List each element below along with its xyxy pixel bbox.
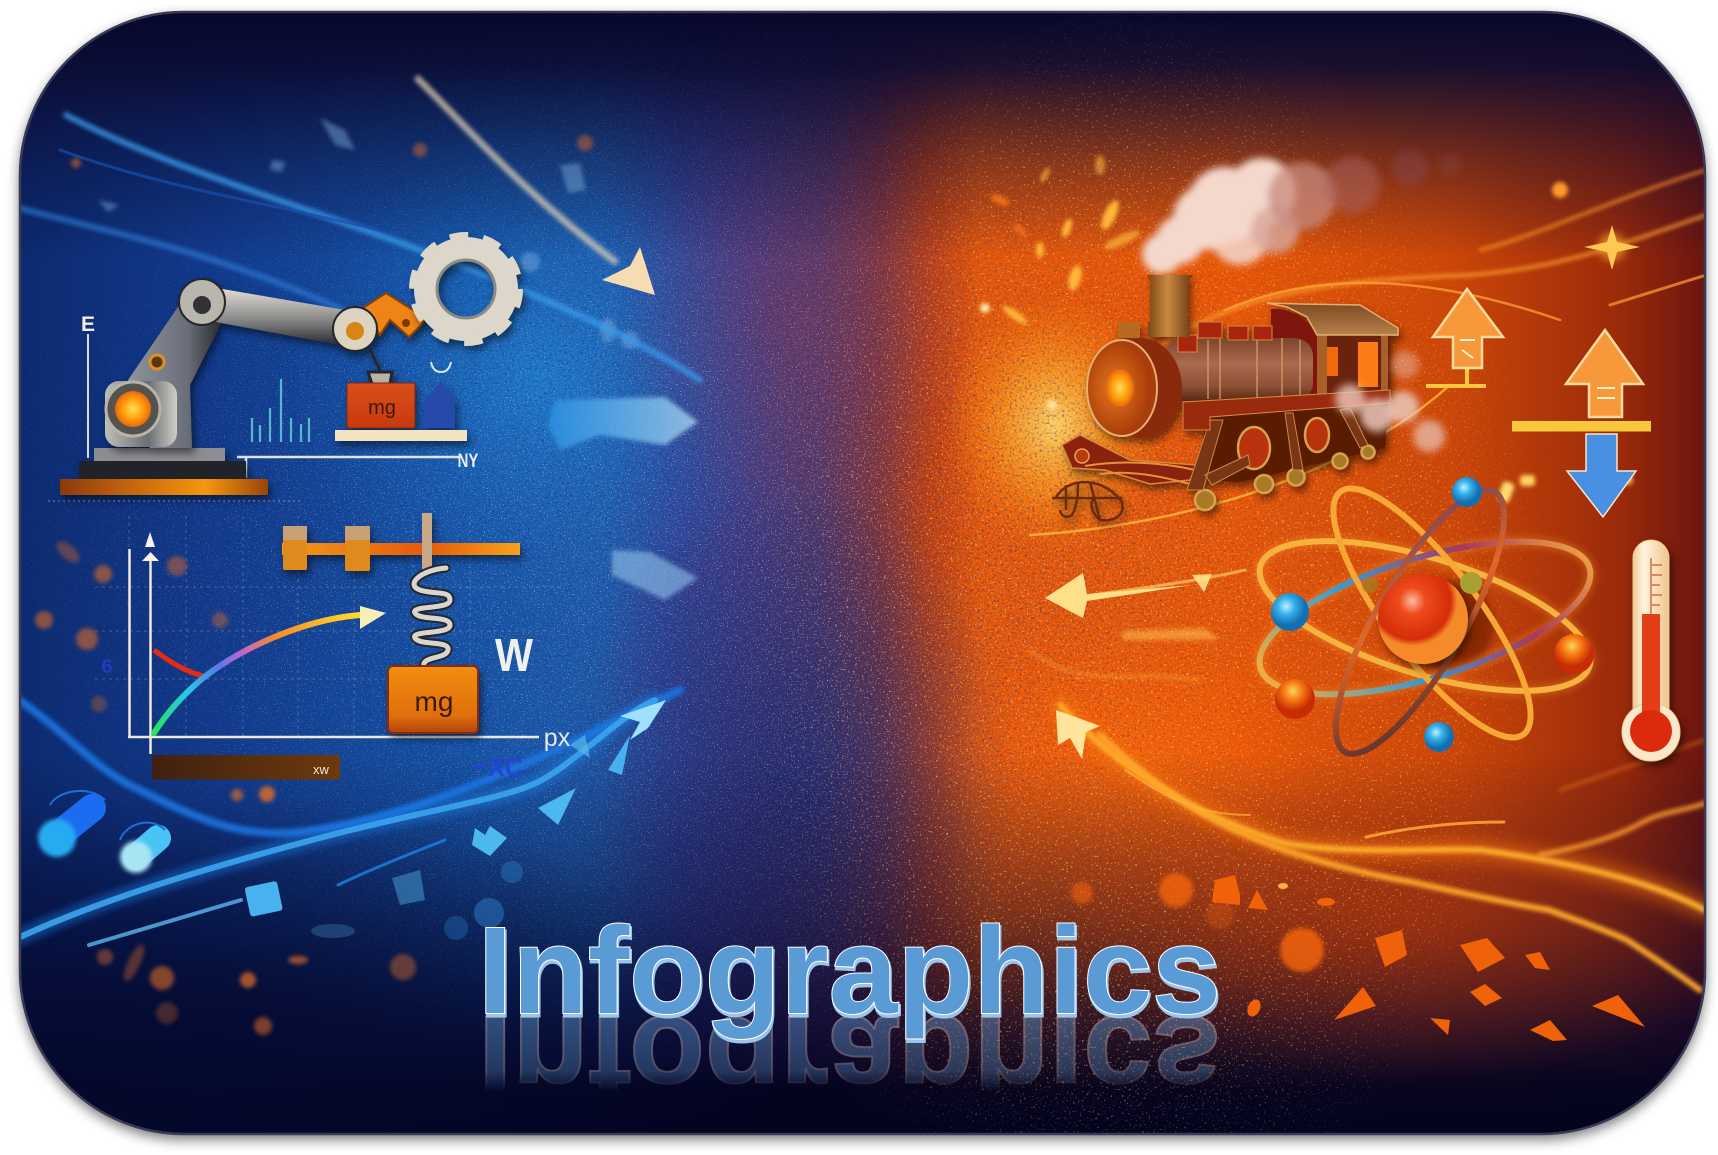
orange arrows on warm side (1045, 573, 1220, 759)
energy axis label: E (81, 313, 95, 336)
locomotive legs (1187, 408, 1368, 490)
locomotive cab (1267, 303, 1398, 398)
orange electrons (1275, 634, 1594, 719)
central train glow (958, 313, 1148, 536)
light blue arrowhead lower (538, 700, 666, 825)
lever beam with blocks (282, 513, 520, 571)
orbit glow (1243, 510, 1607, 726)
translucent blue chevron 1 (548, 397, 698, 450)
cowcatcher cage (1052, 482, 1123, 520)
atom nucleus (1378, 574, 1468, 664)
large cream arrow upper left (416, 77, 655, 295)
energy axis line (87, 334, 89, 458)
thin up arrow (1426, 289, 1503, 386)
locomotive front disc (1087, 340, 1157, 436)
lower navy haze (596, 529, 1006, 970)
dotted separator (48, 500, 300, 502)
robot arm graph group (48, 237, 518, 501)
gear icon (414, 237, 518, 341)
px label: px (544, 724, 571, 752)
left blue glow (362, 234, 727, 530)
mg weight box (388, 666, 478, 733)
thermometer bulb casing (1622, 703, 1680, 761)
bar label: xw (313, 762, 330, 777)
teal bar marks (252, 379, 309, 442)
boiler collar (1098, 338, 1182, 438)
title reflection: Infographics (478, 990, 1221, 1127)
horizontal axis line (237, 457, 459, 478)
atom orbits (1243, 464, 1607, 774)
boiler bands (1208, 338, 1300, 399)
title: Infographics (478, 903, 1221, 1040)
side steam (1335, 351, 1445, 452)
graph axes (128, 549, 539, 754)
atom diagram (1243, 464, 1607, 774)
orange flowing streaks (1030, 170, 1706, 990)
locomotive boiler (1165, 338, 1313, 401)
thermometer tube (1633, 540, 1669, 730)
steam locomotive (1052, 275, 1398, 520)
grid lines (95, 516, 560, 737)
locomotive wheels (1195, 418, 1374, 510)
thermometer mercury (1642, 614, 1660, 734)
locomotive underbody (1200, 402, 1388, 482)
steam domes (1178, 322, 1272, 352)
atom dark halo (1406, 581, 1494, 669)
orange speck texture (708, 14, 1548, 1133)
small chimney (1118, 322, 1140, 338)
amber bokeh dots on blue side (35, 135, 593, 1035)
rainbow work curve (154, 615, 360, 733)
upper purple haze (654, 198, 944, 462)
curve arrowhead (360, 606, 386, 629)
W label: W (495, 629, 534, 681)
noise texture (21, 17, 1518, 1062)
small inner electrons (1362, 572, 1482, 594)
orange shards and sparks (1071, 873, 1645, 1041)
lower right warm shade (1106, 823, 1704, 1066)
spring graph group (95, 513, 571, 782)
brown label bar (152, 755, 340, 780)
front lamp glow (1106, 369, 1134, 407)
blue capsules and fragments (38, 791, 523, 940)
translucent blue chevron 2 (612, 550, 698, 600)
thermometer scale (1651, 558, 1662, 614)
title shadow: Infographics (479, 906, 1222, 1043)
thermometer bulb (1630, 710, 1672, 752)
large up arrow (1566, 330, 1643, 417)
flying embers near train (980, 155, 1633, 503)
spring (414, 568, 450, 668)
left flowing blue streaks (19, 115, 700, 945)
thermometer (1622, 540, 1680, 761)
star flare (1584, 225, 1640, 270)
robot arm (105, 279, 427, 448)
locomotive front ornament (1062, 435, 1197, 484)
translucent upper fragments (98, 118, 639, 349)
NY axis label: NY (458, 451, 479, 472)
robot base (60, 448, 268, 495)
y axis arrowhead and symbol (142, 532, 159, 561)
blue 6 mark: 6 (101, 656, 113, 678)
blue down arrow (1567, 434, 1636, 517)
red falling curve (154, 650, 207, 677)
mg weight block on shelf (335, 381, 467, 441)
smoke plume (1142, 150, 1462, 274)
mg label large: mg (415, 686, 453, 717)
XC label: −XC (473, 752, 523, 782)
yellow divider bar (1512, 421, 1651, 432)
mg label small: mg (368, 397, 396, 419)
chimney (1147, 275, 1193, 337)
blue electrons (1271, 477, 1482, 752)
lower orange glow (966, 692, 1216, 816)
lower left navy shade (22, 834, 594, 1132)
deck frame (1183, 390, 1390, 430)
small U mark (431, 362, 451, 372)
